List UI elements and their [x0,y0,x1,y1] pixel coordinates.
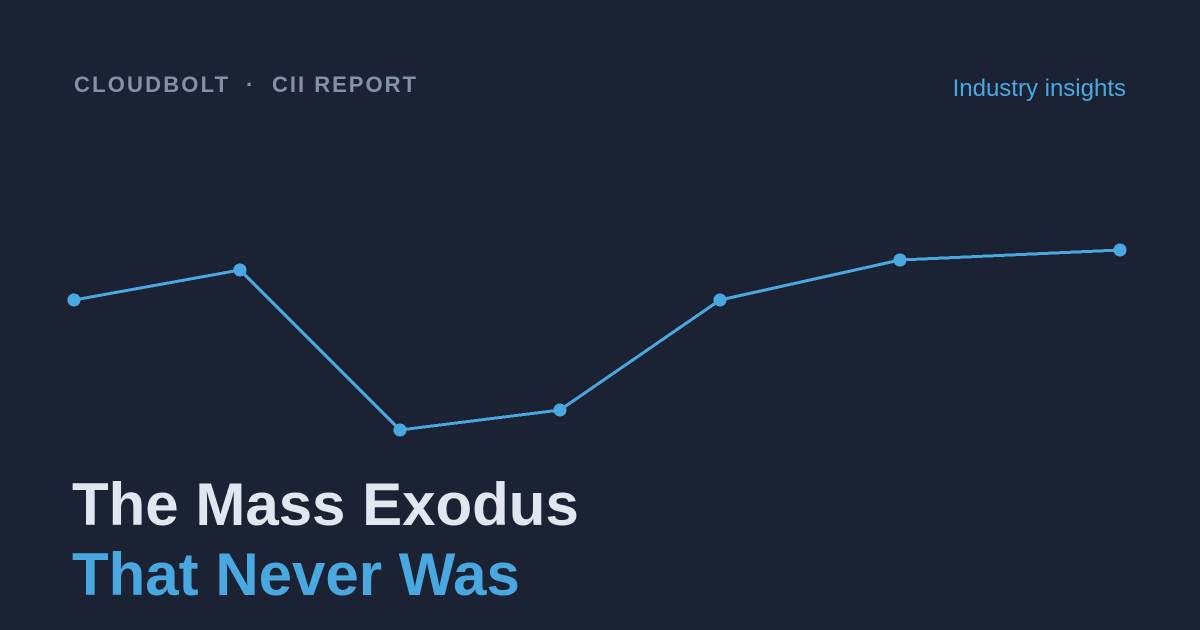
category label: Industry insights [953,75,1126,102]
brand header: CLOUDBOLT [74,72,230,97]
brand header [74,72,418,97]
title: The Mass Exodus That Never Was [72,471,579,608]
brand header: CII REPORT [272,72,418,97]
brand header: · [246,72,253,97]
